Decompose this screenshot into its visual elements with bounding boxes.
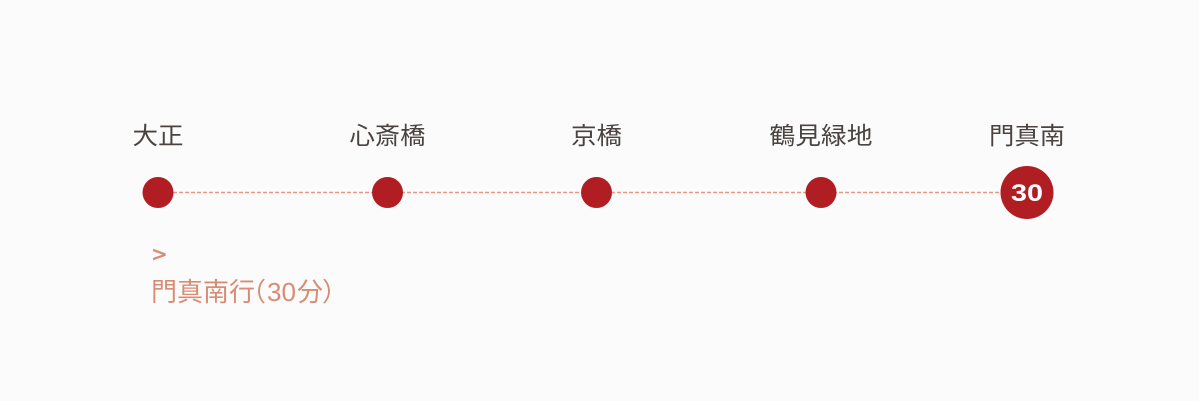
station: 心斎橋 (350, 123, 426, 208)
station: 京橋: 京橋 (571, 123, 622, 150)
direction note: bound for 門真南 (30 min) (151, 242, 348, 307)
station: 大正 (132, 123, 184, 208)
direction note: bound for 門真南 (30 min): > (151, 242, 168, 266)
station: 心斎橋: 心斎橋 (350, 123, 426, 150)
station: 京橋 (571, 123, 622, 208)
station: 門真南 with 30 minute badge (989, 123, 1065, 219)
station: 鶴見緑地: 鶴見緑地 (770, 123, 872, 150)
station: 門真南 with 30 minute badge: 門真南 (989, 123, 1065, 150)
direction note: bound for 門真南 (30 min): 30 (267, 277, 296, 307)
direction note: bound for 門真南 (30 min): 門真南行 (151, 277, 255, 307)
station: 大正: 大正 (132, 123, 184, 150)
dashed route line (158, 192, 1027, 194)
direction note: bound for 門真南 (30 min): （ (240, 277, 266, 307)
station: 門真南 with 30 minute badge: 30 (1011, 180, 1043, 207)
station: 鶴見緑地 (770, 123, 872, 208)
direction note: bound for 門真南 (30 min): ） (322, 277, 348, 307)
direction note: bound for 門真南 (30 min): 分 (297, 277, 323, 307)
